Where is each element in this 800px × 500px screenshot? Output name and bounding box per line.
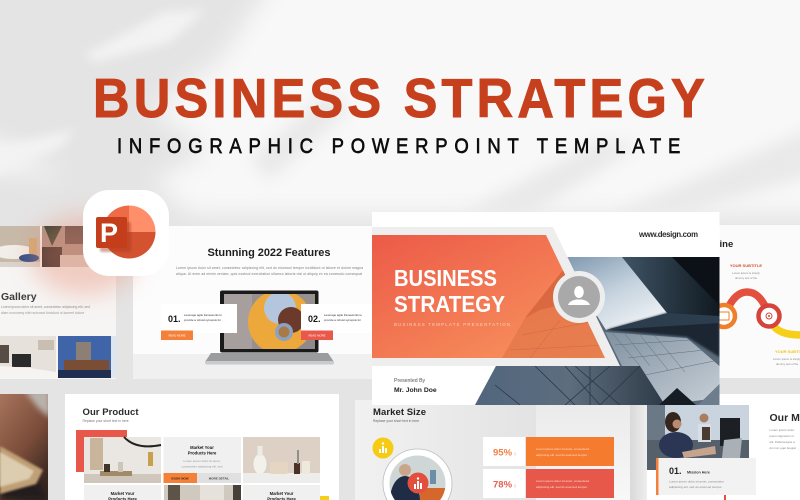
icon: red chart badge: [408, 472, 428, 494]
bottom subtitle: Lorem ipsum is simply: [773, 357, 800, 361]
bottom subtitle: [773, 349, 800, 366]
stat row: 95%: Lorem ipsum dolor sit amet, consectetur: [536, 447, 589, 451]
bottom subtitle: dummy text of the: [776, 362, 799, 366]
gallery photo: desk: [0, 336, 56, 372]
gray chevron band: [372, 227, 620, 366]
mission card: Mission Here: [687, 470, 710, 474]
top subtitle: YOUR SUBTITLE: [730, 263, 762, 268]
product card 1: MORE DETAIL: [209, 476, 229, 480]
timeline curve: [713, 292, 800, 335]
mission body text: dui non eget feugiat: [770, 446, 796, 450]
top subtitle: Lorem ipsum is simply: [732, 271, 760, 275]
stat row: 95%: [483, 437, 614, 466]
heading: our product: Our Product: [82, 407, 139, 418]
red accent square: [76, 430, 127, 472]
feature card 01: READ MORE: [169, 334, 186, 338]
office photo: [647, 405, 749, 470]
product card 1: Market Your: [190, 445, 214, 450]
stat row: 78%: 78%: [493, 480, 513, 490]
feature card 02: provide a robust synopsis for: [324, 318, 361, 322]
product card 3: Market Your: [270, 491, 294, 496]
heading: our mission: Our M: [770, 412, 800, 424]
product photo: towels: [164, 485, 241, 500]
icon: PowerPoint logo: P: [100, 218, 118, 248]
stat row: 95%: adipiscing elit, sed do eiusmod tempor.: [536, 453, 588, 457]
icon: presenter avatar: [553, 271, 605, 323]
panel: gallery slide: diam nonummy nibh euismod tincidunt ut laoreet dolore: [1, 311, 84, 315]
laptop: [205, 290, 334, 364]
product photo: bathroom: [84, 437, 161, 483]
feature card 01: 01.: [168, 314, 181, 324]
cover title: STRATEGY: [394, 291, 505, 317]
panel: timeline slide: [720, 225, 800, 378]
presenter: [394, 378, 437, 394]
heading: timeline: ine: [720, 239, 733, 250]
stat row: 78%: [483, 469, 614, 498]
mission body text: elit. Pellentesque a: [770, 440, 795, 444]
market subheading: Replace your short text in here: [373, 419, 419, 423]
feature card 01: provide a robust synopsis for: [184, 318, 221, 322]
cover title: [394, 265, 505, 317]
mission body text: ipsum dignissim in: [770, 434, 794, 438]
panel: market size slide: [355, 400, 647, 500]
stat row: 95%: II: [514, 452, 517, 456]
product photo: bottles: [243, 437, 320, 483]
product card 1: BOOK NOW: [171, 476, 189, 480]
gallery photo: plant room: [42, 226, 92, 267]
heading: features: Stunning 2022 Features: [208, 247, 330, 259]
gallery photo: blue wall: [58, 336, 116, 378]
feature card 01: [161, 304, 237, 340]
red accent tick: [724, 495, 726, 500]
panel: features slide: [133, 226, 378, 379]
presenter: Presented By: [394, 378, 426, 384]
panel: our product slide: [65, 394, 339, 500]
top subtitle: [730, 263, 762, 280]
mission body text: Lorem ipsum dolor: [770, 428, 794, 432]
subtitle: INFOGRAPHIC POWERPOINT TEMPLATE: [117, 135, 680, 158]
orange title block: [372, 235, 605, 358]
panel: main cover slide: [372, 212, 720, 405]
icon: PowerPoint logo: [30, 190, 169, 295]
product card 1: Products Here: [188, 450, 217, 456]
stat row: 95%: 95%: [493, 448, 513, 458]
stat row: 78%: II: [514, 484, 517, 488]
mission card: 01.: [669, 466, 682, 476]
feature card 02: [301, 304, 378, 340]
product card 3: [243, 485, 320, 500]
mission card: Lorem ipsum dolor sit amet, consectetur: [669, 480, 724, 484]
icon: yellow chart badge: [372, 438, 394, 458]
product card 2: Market Your: [111, 491, 135, 496]
panel: mission slide: [647, 394, 800, 500]
feature card 02: READ MORE: [309, 334, 326, 338]
heading: market size: Market Size: [373, 407, 426, 418]
product card 1: [164, 437, 241, 483]
top subtitle: dummy text of the: [735, 276, 758, 280]
feature card 02: Leverage agile frameworks to: [324, 313, 362, 317]
product subheading: Replace your short text in here: [82, 419, 129, 423]
mission body text: [770, 428, 796, 450]
mission card: adipiscing elit, sed do eiusmod tempor: [669, 485, 722, 489]
product card 1: Lorem ipsum dolor sit amet,: [183, 459, 221, 463]
stat row: 78%: Lorem ipsum dolor sit amet, consectetur: [536, 479, 589, 483]
title: BUSINESS STRATEGY: [93, 68, 705, 129]
presenter: Mr. John Doe: [394, 387, 437, 394]
cover subtitle: BUSINESS TEMPLATE PRESENTATION: [394, 322, 510, 327]
gallery body text: Lorem ipsum dolor sit amet, consectetur adipiscing elit, sed: [1, 305, 90, 309]
building photo: [475, 257, 720, 405]
stat row: 78%: adipiscing elit, sed do eiusmod tempor.: [536, 485, 588, 489]
feature card 02: 02.: [308, 314, 321, 324]
website url: www.design.com: [638, 230, 698, 239]
panel: gallery slide: [0, 226, 116, 379]
features body text: Lorem ipsum dolor sit amet, consectetur adipiscing elit, sed do eiusmod tempor incididunt ut labore et dolore magna: [176, 266, 363, 270]
product card 2: [84, 485, 161, 500]
product card 1: consectetur adipiscing elit, sed: [182, 464, 223, 468]
gallery photo: table: [0, 226, 40, 267]
panel: wood tray photo: [0, 390, 50, 500]
mission card: [656, 458, 756, 495]
yellow accent square: [320, 496, 329, 500]
panel: features slide: aliqua. Ut enim ad minim veniam, quis nostrud exercitation ullamco laboris nisi ut aliquip ex ea commodo consequat: [176, 272, 362, 276]
heading: gallery: Gallery: [1, 291, 37, 303]
cover title: BUSINESS: [394, 265, 497, 291]
circular photo: [383, 449, 452, 500]
feature card 01: Leverage agile frameworks to: [184, 313, 222, 317]
